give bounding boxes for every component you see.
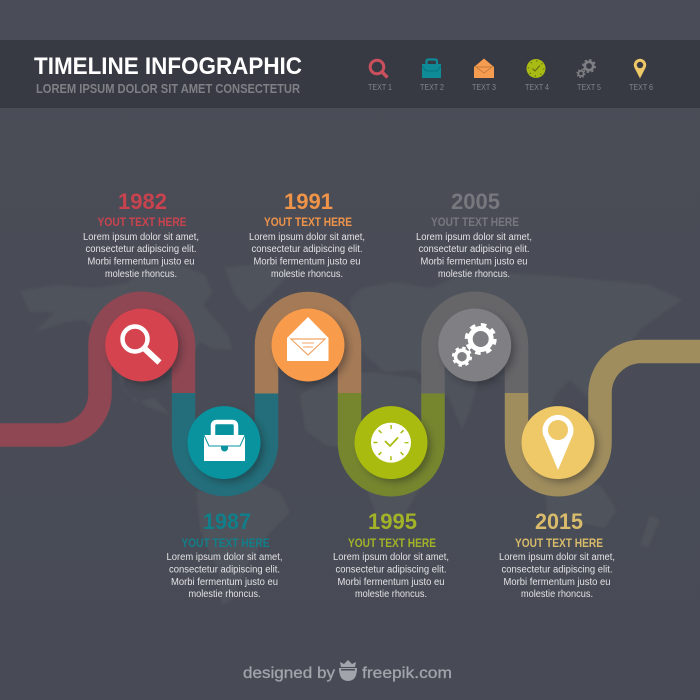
- text block: 2005: Morbi fermentum justo eu: [420, 256, 528, 268]
- track: gray: [433, 303, 516, 394]
- icon: gears: [453, 325, 495, 366]
- text block: 1982: Morbi fermentum justo eu: [88, 256, 194, 268]
- subtitle: LOREM IPSUM DOLOR SIT AMET CONSECTETUR: [36, 82, 300, 96]
- text block: 1991: molestie rhoncus.: [271, 269, 343, 280]
- text block: 1987: [166, 509, 282, 600]
- footer credit: freepik.com: [362, 665, 452, 682]
- text block: 1991: Lorem ipsum dolor sit amet,: [249, 232, 365, 243]
- text block: 2015: molestie rhoncus.: [521, 589, 593, 600]
- legend label 5: TEXT 5: [577, 82, 601, 92]
- legend label 2: TEXT 2: [420, 82, 444, 92]
- text block: 2005: [416, 189, 532, 280]
- text block: 1982: [83, 189, 199, 280]
- legend label 6: TEXT 6: [629, 82, 653, 92]
- text block: 1995: molestie rhoncus.: [355, 589, 427, 600]
- text block: 2005: 2005: [451, 189, 500, 214]
- legend label 4: TEXT 4: [525, 82, 549, 92]
- text block: 2005: consectetur adipiscing elit.: [418, 244, 530, 255]
- text block: 2005: Lorem ipsum dolor sit amet,: [416, 232, 532, 243]
- text block: 2015: Lorem ipsum dolor sit amet,: [499, 552, 615, 563]
- text block: 1982: Lorem ipsum dolor sit amet,: [83, 232, 199, 243]
- world map: [20, 262, 682, 605]
- icon: clock: [371, 423, 411, 463]
- header band: [0, 40, 700, 108]
- text block: 2005: YOUT TEXT HERE: [431, 215, 519, 229]
- text block: 1991: YOUT TEXT HERE: [264, 215, 352, 229]
- track: green: [350, 393, 433, 485]
- text block: 1987: Morbi fermentum justo eu: [171, 577, 278, 588]
- node 2005: gears: [438, 308, 515, 385]
- icon: magnifying glass: [122, 326, 160, 362]
- text block: 1995: Morbi fermentum justo eu: [338, 577, 444, 588]
- legend icon: search: [370, 60, 388, 78]
- text block: 2015: [499, 509, 615, 600]
- legend icon: briefcase: [422, 60, 441, 78]
- icon: envelope: [287, 317, 328, 361]
- text block: 2015: Morbi fermentum justo eu: [504, 577, 610, 588]
- track: teal: [184, 393, 266, 484]
- text block: 1982: 1982: [118, 189, 167, 214]
- text block: 1987: YOUT TEXT HERE: [182, 536, 270, 550]
- text block: 1995: YOUT TEXT HERE: [348, 536, 436, 550]
- text block: 1982: YOUT TEXT HERE: [98, 215, 186, 229]
- legend icon: gears: [577, 60, 595, 78]
- text block: 1995: Lorem ipsum dolor sit amet,: [333, 552, 449, 563]
- legend icon: clock: [526, 59, 546, 78]
- track: orange: [266, 304, 350, 394]
- text block: 2015: 2015: [535, 509, 583, 534]
- icon: freepik logo: [339, 660, 357, 681]
- node 1991: envelope: [272, 308, 348, 385]
- text block: 2015: YOUT TEXT HERE: [515, 536, 603, 550]
- text block: 1991: [249, 189, 365, 280]
- text block: 1987: Lorem ipsum dolor sit amet,: [166, 552, 282, 563]
- node 1982: search: [105, 308, 182, 385]
- node 1987: briefcase: [188, 406, 264, 482]
- node 2015: pin: [522, 406, 598, 482]
- text block: 1991: 1991: [284, 189, 333, 214]
- node 1995: clock: [354, 406, 431, 482]
- track: red: [0, 303, 184, 435]
- legend label 1: TEXT 1: [368, 82, 392, 92]
- track: gold: [516, 352, 700, 485]
- text block: 2015: consectetur adipiscing elit.: [502, 564, 612, 576]
- text block: 1982: molestie rhoncus.: [105, 269, 177, 280]
- legend icon: pin: [634, 59, 646, 78]
- footer credit: [243, 660, 452, 682]
- text block: 1991: consectetur adipiscing elit.: [252, 244, 362, 255]
- text block: 1995: consectetur adipiscing elit.: [336, 564, 446, 576]
- icon: briefcase: [204, 422, 245, 461]
- legend label 3: TEXT 3: [472, 82, 496, 92]
- legend: [368, 58, 653, 92]
- text block: 2005: molestie rhoncus.: [438, 269, 510, 280]
- timeline track: [0, 303, 700, 485]
- text block: 1991: Morbi fermentum justo eu: [254, 256, 360, 268]
- footer credit: designed by: [243, 665, 335, 682]
- text block: 1987: consectetur adipiscing elit.: [169, 564, 280, 576]
- text block: 1982: consectetur adipiscing elit.: [86, 244, 196, 255]
- text block: 1995: 1995: [368, 509, 417, 534]
- title: TIMELINE INFOGRAPHIC: [34, 53, 302, 80]
- icon: map pin: [542, 415, 574, 470]
- text block: 1987: 1987: [203, 509, 251, 534]
- text block: 1987: molestie rhoncus.: [188, 589, 260, 600]
- text block: 1995: [333, 509, 449, 600]
- legend icon: envelope: [474, 58, 494, 78]
